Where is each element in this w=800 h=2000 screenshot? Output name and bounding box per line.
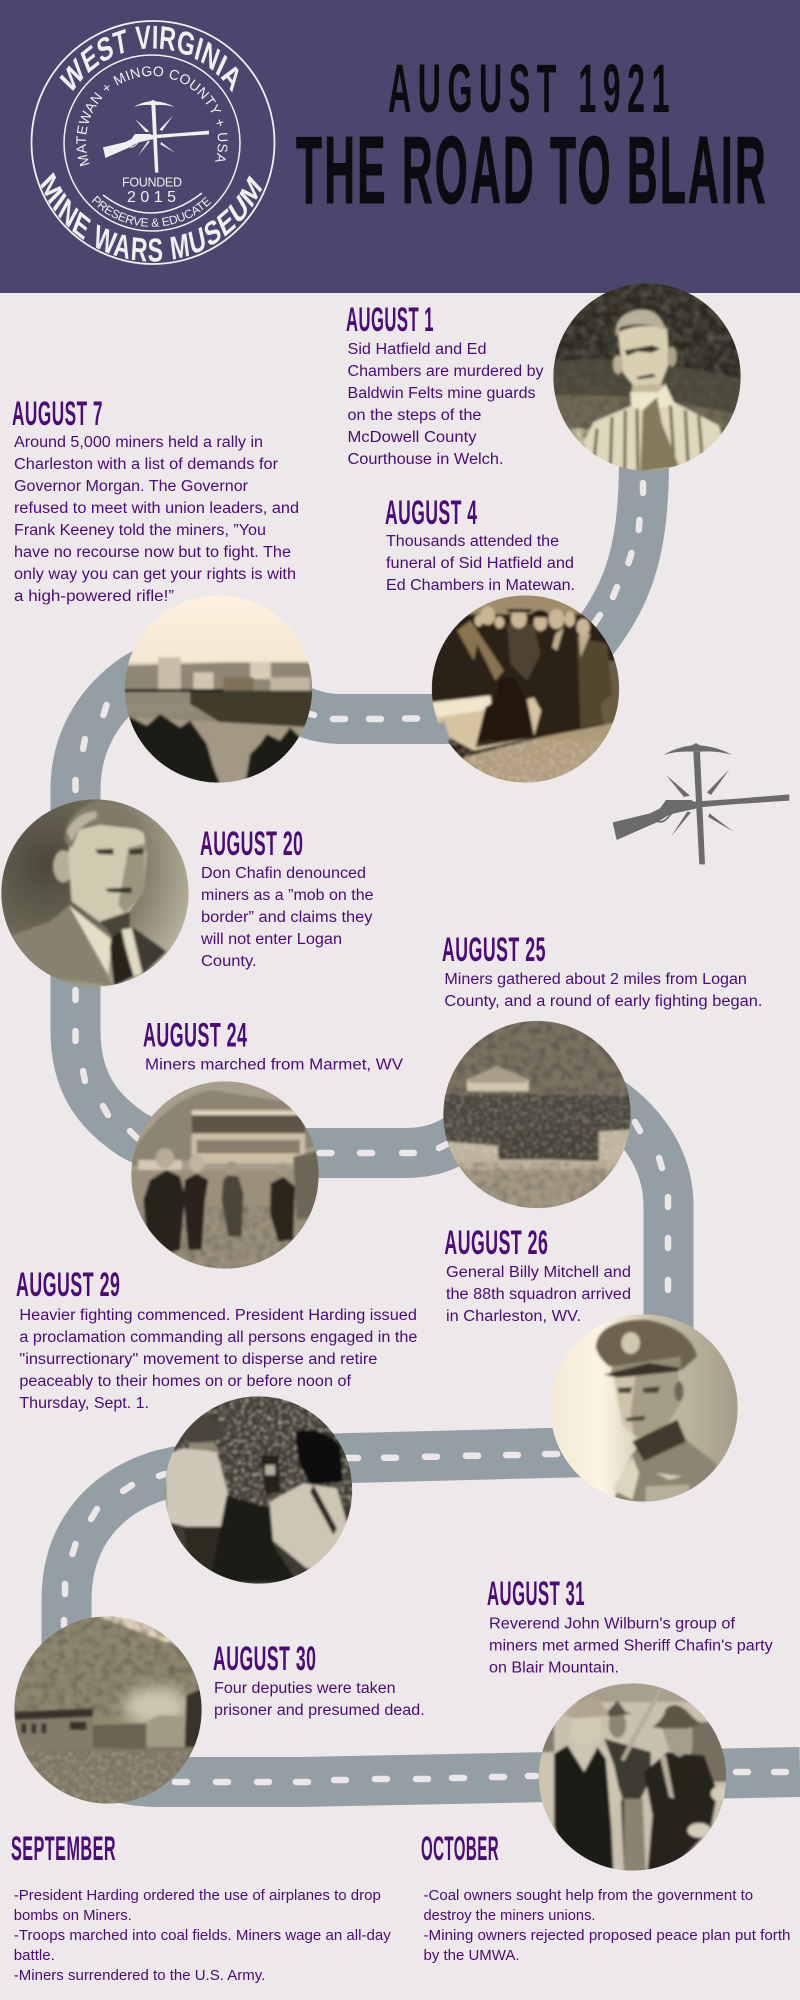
title: [296, 50, 768, 224]
body text: McDowell County: [348, 429, 477, 446]
body text: miners as a ”mob on the: [201, 887, 374, 904]
photo: miners marching in Marmet: [130, 1080, 320, 1270]
event: August 25: [442, 931, 762, 1010]
heading: AUGUST 4: [385, 494, 478, 532]
body text: Heavier fighting commenced. President Harding issued: [19, 1307, 417, 1324]
body text: -Mining owners rejected proposed peace plan put forth: [424, 1927, 790, 1944]
event: August 31: AUGUST 31: [487, 1575, 585, 1613]
body text: battle.: [14, 1947, 55, 1964]
body text: [489, 1616, 773, 1677]
body text: Miners gathered about 2 miles from Logan: [444, 971, 747, 988]
body text: only way you can get your rights is with: [14, 566, 296, 583]
panel: October: [421, 1830, 790, 1964]
body text: Around 5,000 miners held a rally in: [14, 434, 263, 451]
body text: peaceably to their homes on or before noon of: [19, 1373, 352, 1390]
heading: AUGUST 24: [143, 1017, 248, 1055]
photo: Blair town with smoke: [13, 1615, 203, 1805]
photo: crowd of miners gathered: [442, 1020, 632, 1209]
body text: [348, 341, 544, 468]
photo: Charleston river view: [124, 594, 313, 784]
winding road: [64, 460, 800, 1782]
photo: General Billy Mitchell portrait: [549, 1313, 739, 1503]
body text: will not enter Logan: [200, 931, 342, 948]
logo: West Virginia Mine Wars Museum seal: [30, 20, 276, 265]
road centre dashes: [64, 483, 786, 1782]
event: August 1: AUGUST 1: [346, 301, 434, 339]
body text: a proclamation commanding all persons engaged in the: [19, 1329, 417, 1346]
body text: on the steps of the: [348, 407, 482, 424]
photo: funeral of Hatfield and Chambers: [430, 594, 620, 784]
event: August 7: [12, 395, 299, 605]
photo: men with machine gun in foliage: [164, 1395, 353, 1585]
body text: refused to meet with union leaders, and: [14, 500, 299, 517]
photo: Don Chafin portrait: [0, 798, 190, 988]
body text: [424, 1887, 790, 1964]
body text: "insurrectionary" movement to disperse and retire: [19, 1351, 377, 1368]
logo: West Virginia Mine Wars Museum seal: FOUNDED: [122, 176, 182, 190]
body text: Miners marched from Marmet, WV: [145, 1056, 404, 1073]
body text: General Billy Mitchell and: [446, 1264, 631, 1281]
heading: AUGUST 20: [200, 825, 304, 863]
body text: Thursday, Sept. 1.: [19, 1395, 149, 1412]
body text: County, and a round of early fighting began.: [444, 993, 762, 1010]
body text: miners met armed Sheriff Chafin's party: [489, 1638, 773, 1655]
body text: the 88th squadron arrived: [446, 1286, 631, 1303]
event: August 31: [487, 1575, 773, 1677]
logo: West Virginia Mine Wars Museum seal: WEST VIRGINIA: [60, 26, 238, 92]
panel: September: [11, 1830, 391, 1984]
header band: [0, 0, 800, 293]
body text: a high-powered rifle!”: [14, 588, 174, 605]
heading: AUGUST 29: [16, 1266, 120, 1304]
body text: [214, 1680, 425, 1719]
body text: Four deputies were taken: [214, 1680, 396, 1697]
body text: border” and claims they: [201, 909, 373, 926]
body text: funeral of Sid Hatfield and: [386, 555, 574, 572]
body text: Charleston with a list of demands for: [14, 456, 278, 473]
body text: Courthouse in Welch.: [348, 451, 504, 468]
body text: County.: [201, 953, 257, 970]
body text: [14, 434, 299, 605]
logo: West Virginia Mine Wars Museum seal: 2015: [127, 189, 176, 206]
body text: [446, 1264, 631, 1325]
heading: AUGUST 25: [442, 931, 546, 969]
logo: West Virginia Mine Wars Museum seal: PRESERVE & EDUCATE: [92, 196, 212, 227]
event: August 30: [213, 1640, 425, 1719]
body text: on Blair Mountain.: [489, 1660, 619, 1677]
body text: [444, 971, 762, 1010]
photo: Sid Hatfield portrait: [552, 282, 742, 472]
heading: AUGUST 30: [213, 1640, 316, 1678]
body text: prisoner and presumed dead.: [214, 1702, 425, 1719]
body text: -Miners surrendered to the U.S. Army.: [14, 1967, 265, 1984]
body text: Baldwin Felts mine guards: [348, 385, 536, 402]
body text: bombs on Miners.: [14, 1907, 132, 1924]
panel: October: OCTOBER: [421, 1830, 499, 1868]
photo: armed miners with rifle: [538, 1682, 727, 1872]
body text: Don Chafin denounced: [201, 865, 366, 882]
body text: -Coal owners sought help from the government to: [424, 1887, 753, 1904]
body text: destroy the miners unions.: [424, 1907, 596, 1924]
event: August 1: [346, 301, 544, 468]
panel: September: SEPTEMBER: [11, 1830, 116, 1868]
body text: -Troops marched into coal fields. Miners wage an all-day: [14, 1927, 391, 1944]
event: August 29: [16, 1266, 417, 1412]
body text: [386, 533, 575, 594]
body text: [19, 1307, 417, 1412]
icon: crossed pickaxe and rifle: [613, 743, 789, 864]
body text: Sid Hatfield and Ed: [348, 341, 486, 358]
body text: in Charleston, WV.: [446, 1308, 581, 1325]
body text: have no recourse now but to fight. The: [14, 544, 291, 561]
body text: Governor Morgan. The Governor: [14, 478, 248, 495]
event: August 24: [143, 1017, 404, 1073]
heading: AUGUST 7: [12, 395, 103, 433]
body text: [14, 1887, 391, 1984]
body text: Thousands attended the: [386, 533, 559, 550]
logo: West Virginia Mine Wars Museum seal: MINE WARS MUSEUM: [40, 172, 262, 262]
body text: Frank Keeney told the miners, ”You: [14, 522, 266, 539]
body text: Chambers are murdered by: [348, 363, 544, 380]
body text: -President Harding ordered the use of airplanes to drop: [14, 1887, 381, 1904]
body text: Ed Chambers in Matewan.: [386, 577, 575, 594]
event: August 20: [200, 825, 374, 970]
event: August 26: [444, 1224, 631, 1325]
body text: Reverend John Wilburn's group of: [489, 1616, 736, 1633]
logo: West Virginia Mine Wars Museum seal: MATEWAN + MINGO COUNTY + USA: [76, 66, 228, 166]
body text: [200, 865, 374, 970]
event: August 4: [385, 494, 575, 594]
heading: AUGUST 26: [444, 1224, 548, 1262]
body text: by the UMWA.: [424, 1947, 520, 1964]
